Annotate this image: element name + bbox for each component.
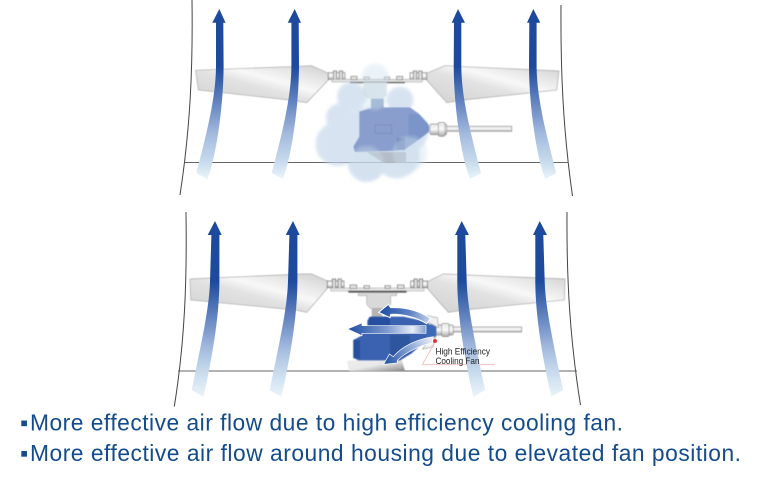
heat clouds behind gearbox: [316, 82, 428, 182]
benefit line 2: More effective air flow around housing due to elevated fan position.: [30, 440, 741, 466]
panel: improved fan with high efficiency cooling fan: [174, 212, 581, 406]
drive shaft and coupling: [430, 122, 512, 136]
air flow arrow 1: [192, 221, 222, 397]
benefit line 2: ▪: [20, 440, 28, 466]
gearbox housing: [353, 316, 439, 360]
leader lines: [422, 345, 495, 365]
cooling fan label: Cooling Fan: [436, 355, 480, 366]
air flow arrow 4: [533, 221, 563, 397]
ground line: [185, 162, 568, 164]
benefit line 1: More effective air flow due to high efficiency cooling fan.: [30, 410, 623, 436]
air flow arrow over housing top: [379, 304, 431, 324]
air flow arrow 2: [272, 9, 301, 179]
cooling fan label: High Efficiency: [436, 345, 490, 356]
air flow arrow 2: [270, 221, 300, 397]
air flow arrow 4: [527, 9, 556, 179]
right fan blade: [427, 274, 565, 312]
left fan blade: [190, 274, 327, 312]
ground line: [178, 370, 577, 372]
fan hub: [328, 71, 427, 99]
air flow arrow 1: [196, 9, 226, 179]
air flow arrow through housing: [348, 323, 426, 336]
gearbox obscured by heat: [353, 99, 429, 163]
cooling fan label: [436, 345, 490, 366]
heat haze over gearbox and hub: [349, 63, 427, 181]
air flow arrow 3: [455, 221, 485, 397]
right fan blade: [427, 66, 559, 103]
panel: conventional fan without cooling fan: [180, 0, 572, 196]
air flow arrow down to base: [384, 337, 433, 364]
left fan blade: [196, 66, 328, 103]
base plinth: [347, 359, 405, 371]
drive shaft and coupling: [435, 323, 522, 337]
air flow arrow 3: [452, 9, 481, 179]
text block: benefits: [20, 410, 741, 466]
cooling tower walls: [180, 0, 572, 196]
cooling fan marker: [433, 339, 437, 343]
benefit line 1: ▪: [20, 410, 28, 436]
fan hub: [327, 279, 427, 318]
cooling tower walls: [174, 212, 581, 406]
